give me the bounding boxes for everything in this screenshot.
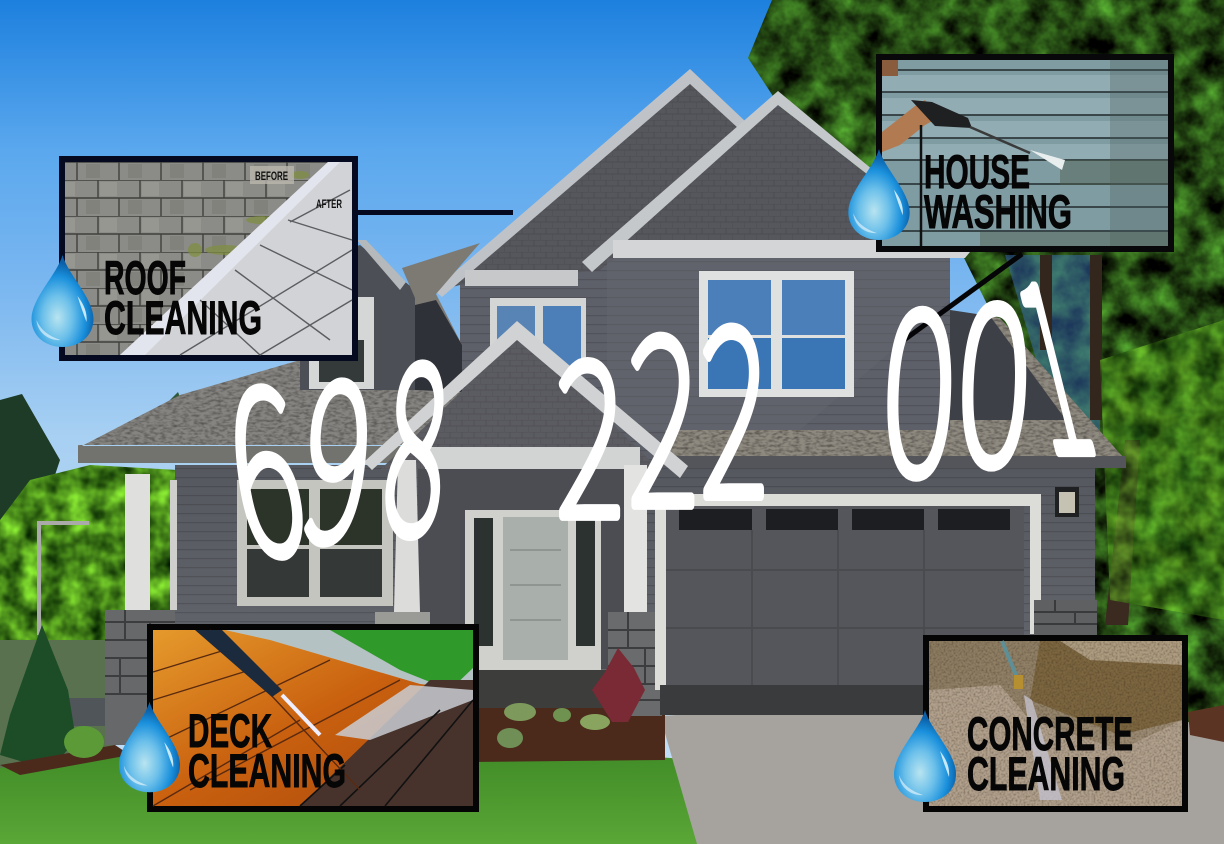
right gable	[590, 105, 950, 262]
panel: roof cleaning	[32, 156, 358, 361]
connector: house washing card to wall	[904, 254, 1022, 340]
lawn	[0, 745, 700, 844]
left upper wing	[300, 245, 415, 390]
siding boards	[882, 60, 1168, 246]
after shingles	[120, 162, 352, 355]
phone number: 1	[980, 181, 1117, 520]
phone number: 0	[878, 209, 962, 540]
heading	[104, 251, 262, 344]
phone number	[207, 181, 1117, 620]
house base shadow	[660, 685, 925, 715]
driveway	[660, 700, 1224, 844]
garage door	[666, 506, 1024, 686]
heading: WASHING	[924, 185, 1072, 238]
porch beam	[425, 447, 640, 469]
panel: deck cleaning	[119, 624, 479, 812]
moss patches	[188, 171, 324, 257]
upper wall light	[607, 258, 950, 430]
wall lantern	[1055, 487, 1079, 517]
concrete surface	[929, 641, 1182, 806]
tag after text: AFTER	[316, 197, 342, 211]
heading: HOUSE	[924, 145, 1030, 198]
shrubs	[64, 648, 645, 758]
background: left trees	[0, 392, 185, 770]
heading: CLEANING	[188, 744, 346, 797]
porch gable	[380, 335, 660, 470]
tag: before	[250, 166, 294, 184]
heading	[188, 704, 346, 797]
card frame	[59, 156, 358, 361]
mulch beds	[0, 705, 1224, 775]
house	[78, 69, 1126, 745]
clean lower area	[929, 685, 1182, 806]
card frame	[147, 624, 479, 812]
lower left roof	[78, 360, 462, 448]
main window	[699, 271, 854, 397]
stone pier right	[1034, 600, 1097, 636]
board highlights and lines	[882, 60, 1168, 246]
cleaned wet boards	[300, 680, 473, 806]
phone number: 2	[700, 224, 768, 564]
panel: house washing	[848, 54, 1174, 252]
stone pier left	[105, 610, 175, 745]
heading: CLEANING	[104, 291, 262, 344]
deck boards	[153, 630, 473, 806]
phone number: 2	[556, 268, 624, 579]
phone number: 8	[375, 262, 459, 601]
heading: DECK	[188, 704, 272, 757]
connector: roof card to roof	[356, 210, 513, 215]
secondary window	[490, 298, 586, 368]
porch recess	[418, 469, 625, 669]
heading	[967, 707, 1133, 800]
upper band	[613, 240, 980, 258]
dormer window	[309, 297, 374, 389]
background: right trees	[748, 0, 1224, 725]
heading	[924, 145, 1072, 238]
front door	[465, 510, 601, 670]
phone number: 6	[207, 288, 321, 620]
speckle texture	[929, 641, 1182, 806]
panel: concrete cleaning	[894, 635, 1188, 812]
arm and spray wand	[882, 60, 1065, 246]
dirty upper area	[1030, 641, 1182, 735]
phone number: 9	[292, 285, 385, 604]
left high gable	[440, 80, 760, 290]
phone number: 2	[628, 234, 698, 574]
lower wall	[175, 465, 1095, 695]
card frame	[923, 635, 1188, 812]
porch gable trim	[364, 321, 688, 478]
lawn and stones	[225, 630, 473, 690]
right lower roof	[665, 310, 1122, 458]
garage frame	[655, 494, 1041, 690]
icon: water drop	[119, 702, 180, 792]
board seams	[153, 630, 400, 806]
valley roof	[402, 243, 480, 400]
stone pier centre	[375, 612, 662, 716]
left window	[237, 480, 393, 606]
icon: water drop	[848, 149, 910, 240]
heading: CLEANING	[967, 747, 1125, 800]
left gable trim	[434, 69, 746, 297]
icon: water drop	[894, 710, 956, 802]
left eave	[78, 446, 438, 463]
icon: water drop	[32, 255, 94, 347]
heading: CONCRETE	[967, 707, 1133, 760]
before shingles	[65, 162, 352, 355]
right eave	[668, 456, 1126, 468]
tag before text: BEFORE	[255, 169, 288, 183]
columns	[125, 460, 647, 613]
heading: ROOF	[104, 251, 186, 304]
spray wand	[1002, 641, 1018, 680]
card frame	[876, 54, 1174, 252]
phone number: 0	[953, 208, 1037, 529]
upper wall	[460, 245, 950, 465]
spray wand	[195, 630, 282, 697]
porch steps	[478, 670, 608, 708]
right gable trim	[582, 91, 885, 272]
